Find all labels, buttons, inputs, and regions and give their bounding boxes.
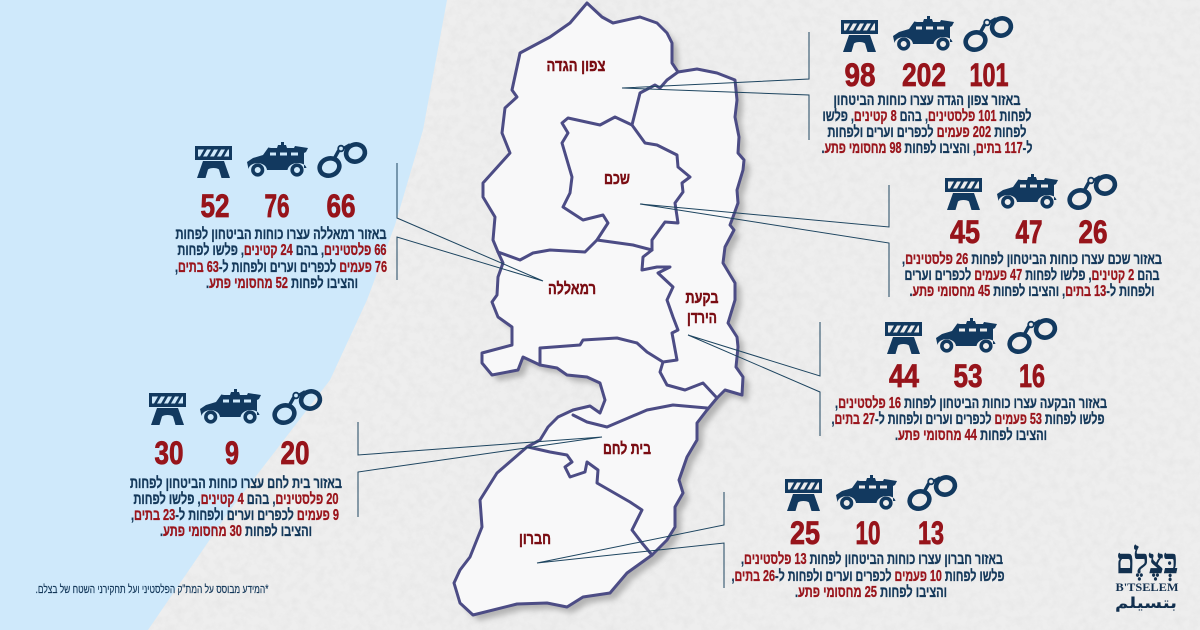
logo: B'Tselem xyxy=(1115,544,1179,612)
icon: handcuffs xyxy=(272,389,322,425)
panel: Jordan Valley xyxy=(831,318,1107,444)
text block: פלשו לפחות 53 פעמים לכפרים וערים ולפחות ל-27 בתים, xyxy=(831,411,1104,428)
map land fill with shadow xyxy=(454,3,744,615)
district border: Jordan Valley west xyxy=(642,250,717,398)
number: arrests: 66 xyxy=(326,188,356,224)
number: checkpoints: 30 xyxy=(154,435,184,471)
leader lines: north xyxy=(622,32,809,140)
text block: לפחות 202 פעמים לכפרים וערים ולפחות xyxy=(828,124,1027,141)
district border: Bethlehem north xyxy=(573,405,707,427)
icon: handcuffs xyxy=(963,16,1013,52)
panel: Bethlehem xyxy=(130,389,342,540)
number: arrests: 26 xyxy=(1078,214,1108,250)
map outer border xyxy=(454,3,744,615)
label: north Jordan Valley district: צפון הגדה xyxy=(546,57,606,75)
text block: 66 פלסטינים, בהם 24 קטינים, פלשו לפחות xyxy=(178,242,387,259)
icon: handcuffs xyxy=(1067,174,1117,210)
text block: פלשו לפחות 10 פעמים לכפרים וערים ולפחות ל-26 בתים, xyxy=(732,568,1004,585)
sea area xyxy=(0,0,447,630)
number: checkpoints: 25 xyxy=(790,515,820,551)
label: Jordan Valley: בקעת xyxy=(686,289,718,307)
text block xyxy=(822,92,1033,157)
district border: Ramallah north xyxy=(498,240,597,260)
leader lines: Hebron xyxy=(537,492,724,588)
text block: 9 פעמים לכפרים וערים ולפחות ל-23 בתים, xyxy=(131,507,339,524)
text block: ל-117 בתים, והציבו לפחות 98 מחסומי פתע. xyxy=(822,140,1033,157)
number: arrests: 13 xyxy=(918,515,944,551)
text block xyxy=(732,551,1004,601)
icon: military vehicle xyxy=(200,389,261,422)
leader lines: Bethlehem xyxy=(358,422,602,517)
text block: באזור בית לחם עצרו כוחות הביטחון לפחות xyxy=(130,475,342,492)
number: arrests: 101 xyxy=(970,57,1008,93)
footnote: *המידע מבוסס על המת"ק הפלסטיני ועל תחקירני השטח של בצלם. xyxy=(36,583,269,596)
district border: Hebron and Bethlehem xyxy=(528,447,652,555)
panel: north xyxy=(822,16,1033,157)
logo Hebrew wordmark: בְּצֶלֶם xyxy=(1116,544,1178,581)
icon: military vehicle xyxy=(936,318,997,351)
icon: barrier xyxy=(945,178,982,210)
text block: 76 פעמים לכפרים וערים ולפחות ל-63 בתים, xyxy=(175,259,387,276)
text block xyxy=(831,395,1107,444)
text block xyxy=(130,475,342,540)
text block xyxy=(902,251,1162,300)
label: Jordan Valley: הירדן xyxy=(687,309,717,327)
number: raids: 10 xyxy=(856,515,880,551)
text block: לפחות 101 פלסטינים, בהם 8 קטינים, פלשו xyxy=(822,108,1032,125)
panel: Nablus xyxy=(902,174,1162,300)
text block: והציבו לפחות 25 מחסומי פתע. xyxy=(795,584,947,601)
text block: באזור הבקעה עצרו כוחות הביטחון לפחות 16 פלסטינים, xyxy=(835,395,1107,412)
number: checkpoints: 44 xyxy=(889,358,919,394)
label: Bethlehem: בית לחם xyxy=(603,440,651,458)
number: raids: 47 xyxy=(1016,214,1042,250)
panel: Ramallah xyxy=(175,142,387,292)
number: raids: 9 xyxy=(225,435,239,471)
text block: באזור חברון עצרו כוחות הביטחון לפחות 13 פלסטינים, xyxy=(741,551,1003,568)
number: checkpoints: 45 xyxy=(950,214,980,250)
icon: military vehicle xyxy=(997,174,1058,207)
text block xyxy=(175,226,387,292)
label: Jordan Valley xyxy=(686,289,718,327)
number: checkpoints: 52 xyxy=(200,188,230,224)
district border: north and Jordan Valley xyxy=(632,72,678,125)
map of the West Bank xyxy=(454,3,744,615)
text block: 20 פלסטינים, בהם 4 קטינים, פלשו לפחות xyxy=(134,491,338,508)
text block: בהם 2 קטינים, פלשו לפחות 47 פעמים לכפרים וערים xyxy=(904,267,1160,284)
number: raids: 76 xyxy=(264,188,290,224)
district border: Ramallah south xyxy=(540,338,663,365)
text block: באזור צפון הגדה עצרו כוחות הביטחון xyxy=(834,92,1021,109)
logo Arabic wordmark: بتسيلم xyxy=(1115,594,1177,612)
icon: military vehicle xyxy=(247,142,308,175)
leader lines: Ramallah xyxy=(397,163,543,281)
number: checkpoints: 98 xyxy=(844,57,876,93)
text block: והציבו לפחות 52 מחסומי פתע. xyxy=(206,275,358,292)
label: Hebron: חברון xyxy=(519,530,551,548)
icon: barrier xyxy=(149,393,186,425)
district border: Nablus xyxy=(562,117,690,250)
icon: military vehicle xyxy=(893,16,954,49)
icon: barrier xyxy=(841,20,878,52)
leader lines: Jordan Valley xyxy=(688,322,820,436)
text block: ולפחות ל-13 בתים, והציבו לפחות 45 מחסומי פתע. xyxy=(909,283,1154,300)
icon: barrier xyxy=(885,322,922,354)
panel: Hebron xyxy=(732,475,1004,601)
icon: handcuffs xyxy=(317,142,367,178)
number: arrests: 16 xyxy=(1019,358,1045,394)
label: Ramallah: רמאללה xyxy=(548,280,596,298)
icon: handcuffs xyxy=(907,475,957,511)
text block: והציבו לפחות 44 מחסומי פתע. xyxy=(895,427,1047,444)
number: raids: 53 xyxy=(954,358,982,394)
number: arrests: 20 xyxy=(280,435,310,471)
leader lines: Nablus xyxy=(640,185,889,297)
icon: handcuffs xyxy=(1007,318,1057,354)
label: Nablus: שכם xyxy=(604,170,630,188)
logo Latin wordmark: B'TSELEM xyxy=(1116,582,1179,594)
icon: military vehicle xyxy=(836,475,897,508)
text block: באזור רמאללה עצרו כוחות הביטחון לפחות xyxy=(176,226,387,243)
text block: והציבו לפחות 30 מחסומי פתע. xyxy=(160,523,312,540)
icon: barrier xyxy=(785,479,822,511)
number: raids: 202 xyxy=(902,57,946,93)
icon: barrier xyxy=(195,146,232,178)
